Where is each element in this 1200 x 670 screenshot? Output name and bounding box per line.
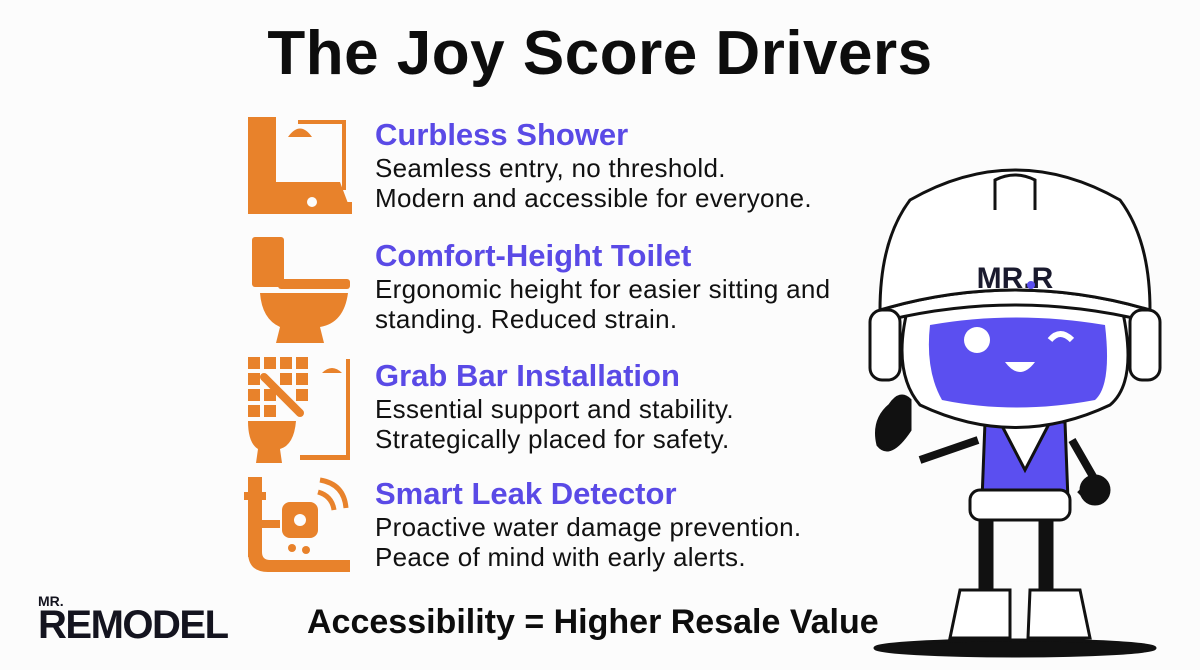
text: grab bar: Strategically placed for safety.	[375, 424, 730, 454]
icon: leak detector	[244, 477, 350, 572]
text: leak detector: Smart Leak Detector	[375, 476, 677, 511]
text: toilet	[375, 238, 830, 334]
body	[982, 422, 1068, 500]
helmet & head	[902, 260, 1128, 428]
text: toilet: Comfort-Height Toilet	[375, 238, 691, 273]
logo: Mr. Remodel: REMODEL	[38, 603, 228, 647]
legs	[980, 500, 992, 600]
text: toilet: Ergonomic height for easier sitting and	[375, 274, 830, 304]
text: curbless shower	[375, 117, 812, 213]
logo: Mr. Remodel: MR.	[38, 593, 64, 609]
text: toilet: standing. Reduced strain.	[375, 304, 677, 334]
text: curbless shower: Seamless entry, no threshold.	[375, 153, 726, 183]
illustration: robot mascot	[868, 168, 1162, 658]
illustration: robot mascot: MR.R	[977, 262, 1054, 295]
text: curbless shower: Curbless Shower	[375, 117, 628, 152]
text: leak detector	[375, 476, 801, 572]
title: The Joy Score Drivers	[267, 19, 933, 88]
icon: curbless shower	[248, 117, 352, 214]
text: leak detector: Peace of mind with early alerts.	[375, 542, 746, 572]
text: grab bar	[375, 358, 734, 454]
icon: toilet	[252, 237, 350, 343]
icon: grab bar	[248, 357, 350, 463]
text: grab bar: Grab Bar Installation	[375, 358, 680, 393]
text: leak detector: Proactive water damage prevention.	[375, 512, 801, 542]
text: grab bar: Essential support and stability.	[375, 394, 734, 424]
arms	[920, 440, 978, 460]
text: curbless shower: Modern and accessible for everyone.	[375, 183, 812, 213]
tagline: Accessibility = Higher Resale Value	[307, 603, 879, 641]
